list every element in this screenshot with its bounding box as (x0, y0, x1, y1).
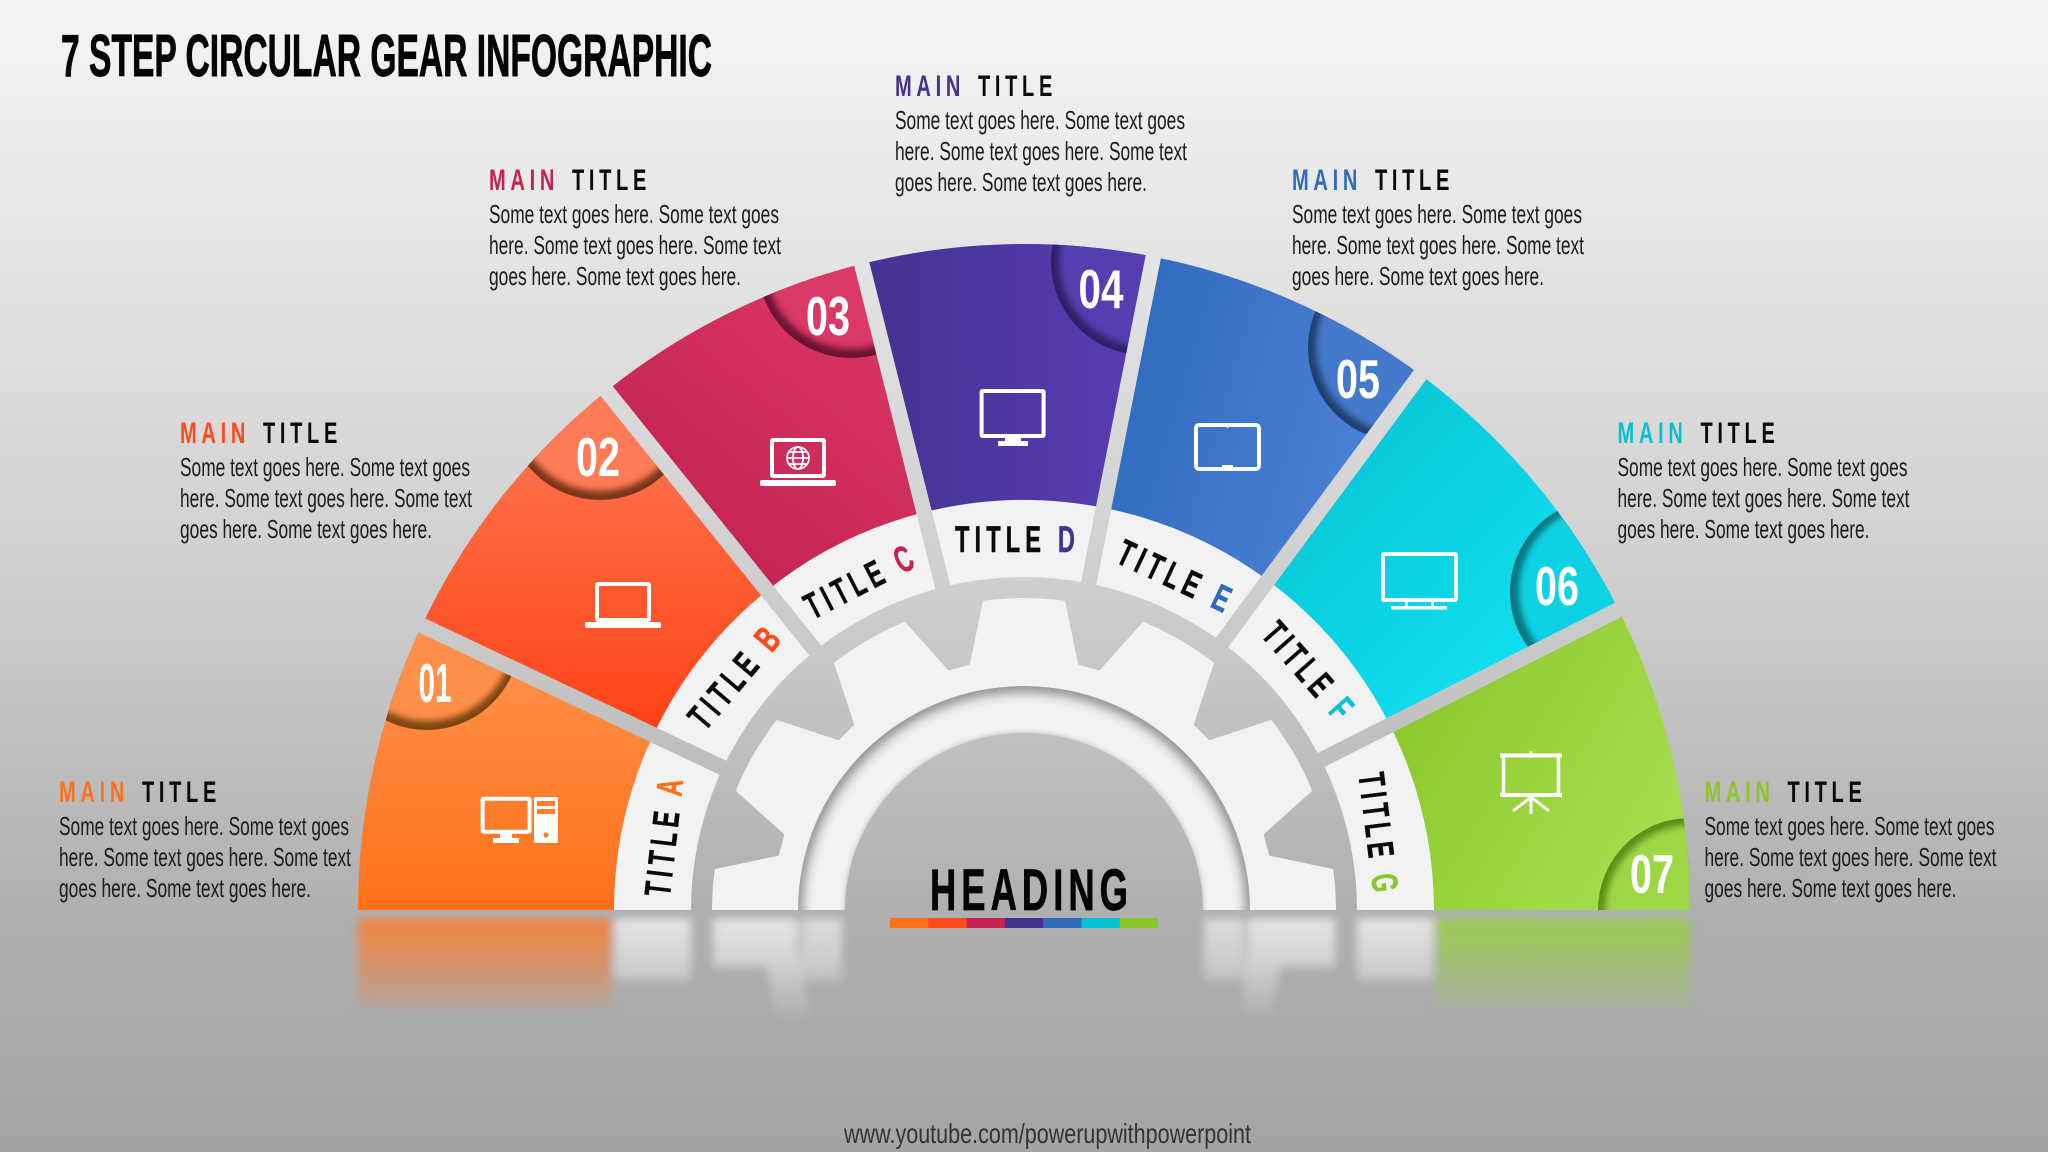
text block 07 (1704, 776, 1997, 903)
text block 02: goes here. Some text goes here. (180, 514, 432, 544)
segment 02 red-orange (425, 396, 762, 728)
label: title F: TITLE F (1254, 614, 1365, 731)
icon: laptop (585, 584, 661, 628)
segment 01 orange (358, 632, 650, 910)
text block 03: TITLE (572, 164, 651, 197)
text block 02: MAIN (180, 417, 250, 450)
icon: widescreen monitor (1383, 554, 1456, 610)
number 01: 01 (418, 652, 452, 714)
segment 04 purple (869, 244, 1146, 510)
text block 02 (180, 417, 473, 544)
segment 06 cyan (1274, 379, 1615, 718)
icon: desktop computer with tower (483, 797, 558, 843)
segment ring and coloured wedges (358, 244, 1690, 910)
icon: tablet (1196, 425, 1259, 469)
text block 01: TITLE (142, 776, 221, 809)
text block 04: MAIN (895, 70, 965, 103)
text block 05: goes here. Some text goes here. (1292, 261, 1544, 291)
text block 03: here. Some text goes here. Some text (489, 230, 782, 260)
number 03: 03 (806, 285, 850, 347)
title: 7 STEP CIRCULAR GEAR INFOGRAPHIC (61, 23, 712, 89)
text block 01: here. Some text goes here. Some text (59, 842, 352, 872)
label: title D: TITLE D (955, 519, 1080, 560)
label: title G: TITLE G (1350, 770, 1407, 899)
colour bar under heading (890, 918, 1158, 928)
text block 06 (1618, 417, 1910, 544)
semicircular gear diagram (358, 244, 1690, 910)
text block 02: Some text goes here. Some text goes (180, 452, 470, 482)
text block 06: Some text goes here. Some text goes (1618, 452, 1908, 482)
text block 05: here. Some text goes here. Some text (1292, 230, 1585, 260)
step numbers (418, 258, 1674, 905)
text block 06: MAIN (1618, 417, 1688, 450)
number 07: 07 (1630, 843, 1674, 905)
segment 07 green (1393, 616, 1690, 910)
text block 01 (59, 776, 352, 903)
number 06: 06 (1535, 555, 1579, 617)
text block 07: TITLE (1788, 776, 1866, 809)
text block 05: MAIN (1292, 164, 1362, 197)
segment 05 blue (1111, 258, 1414, 576)
text block 01: Some text goes here. Some text goes (59, 811, 349, 841)
gear (712, 598, 1336, 910)
icon: projection screen (1500, 751, 1562, 814)
text block 05 (1292, 164, 1585, 291)
text block 05: TITLE (1375, 164, 1454, 197)
label: title A: TITLE A (637, 772, 692, 898)
number 05: 05 (1336, 348, 1380, 410)
reflection of the gear and segments (358, 919, 1690, 1018)
text block 04 (895, 70, 1188, 197)
text block 05: Some text goes here. Some text goes (1292, 199, 1582, 229)
segment titles (637, 519, 1407, 899)
inner ring (798, 686, 1250, 910)
text block 03 (489, 164, 782, 291)
icon: monitor (982, 391, 1044, 446)
text block 04: Some text goes here. Some text goes (895, 105, 1185, 135)
text block 04: goes here. Some text goes here. (895, 167, 1147, 197)
text block 01: goes here. Some text goes here. (59, 873, 311, 903)
text block 03: MAIN (489, 164, 559, 197)
title ring (614, 500, 1434, 910)
text block 06: here. Some text goes here. Some text (1618, 483, 1910, 513)
text block 02: TITLE (263, 417, 342, 450)
label: title E: TITLE E (1111, 532, 1242, 622)
text block 03: Some text goes here. Some text goes (489, 199, 779, 229)
segment 03 crimson (612, 266, 917, 586)
label: title C: TITLE C (798, 535, 925, 627)
text block 07: MAIN (1704, 776, 1774, 809)
text block 02: here. Some text goes here. Some text (180, 483, 473, 513)
text block 04: TITLE (978, 70, 1057, 103)
text block 04: here. Some text goes here. Some text (895, 136, 1188, 166)
text block 03: goes here. Some text goes here. (489, 261, 741, 291)
number 02: 02 (576, 426, 620, 488)
text block 06: TITLE (1700, 417, 1780, 450)
footer url: www.youtube.com/powerupwithpowerpoint (843, 1118, 1251, 1149)
heading: HEADING (930, 858, 1133, 923)
text block 01: MAIN (59, 776, 129, 809)
icon: laptop with globe (760, 440, 836, 486)
number 04: 04 (1078, 258, 1124, 320)
text block 06: goes here. Some text goes here. (1618, 514, 1870, 544)
label: title B: TITLE B (680, 615, 792, 737)
